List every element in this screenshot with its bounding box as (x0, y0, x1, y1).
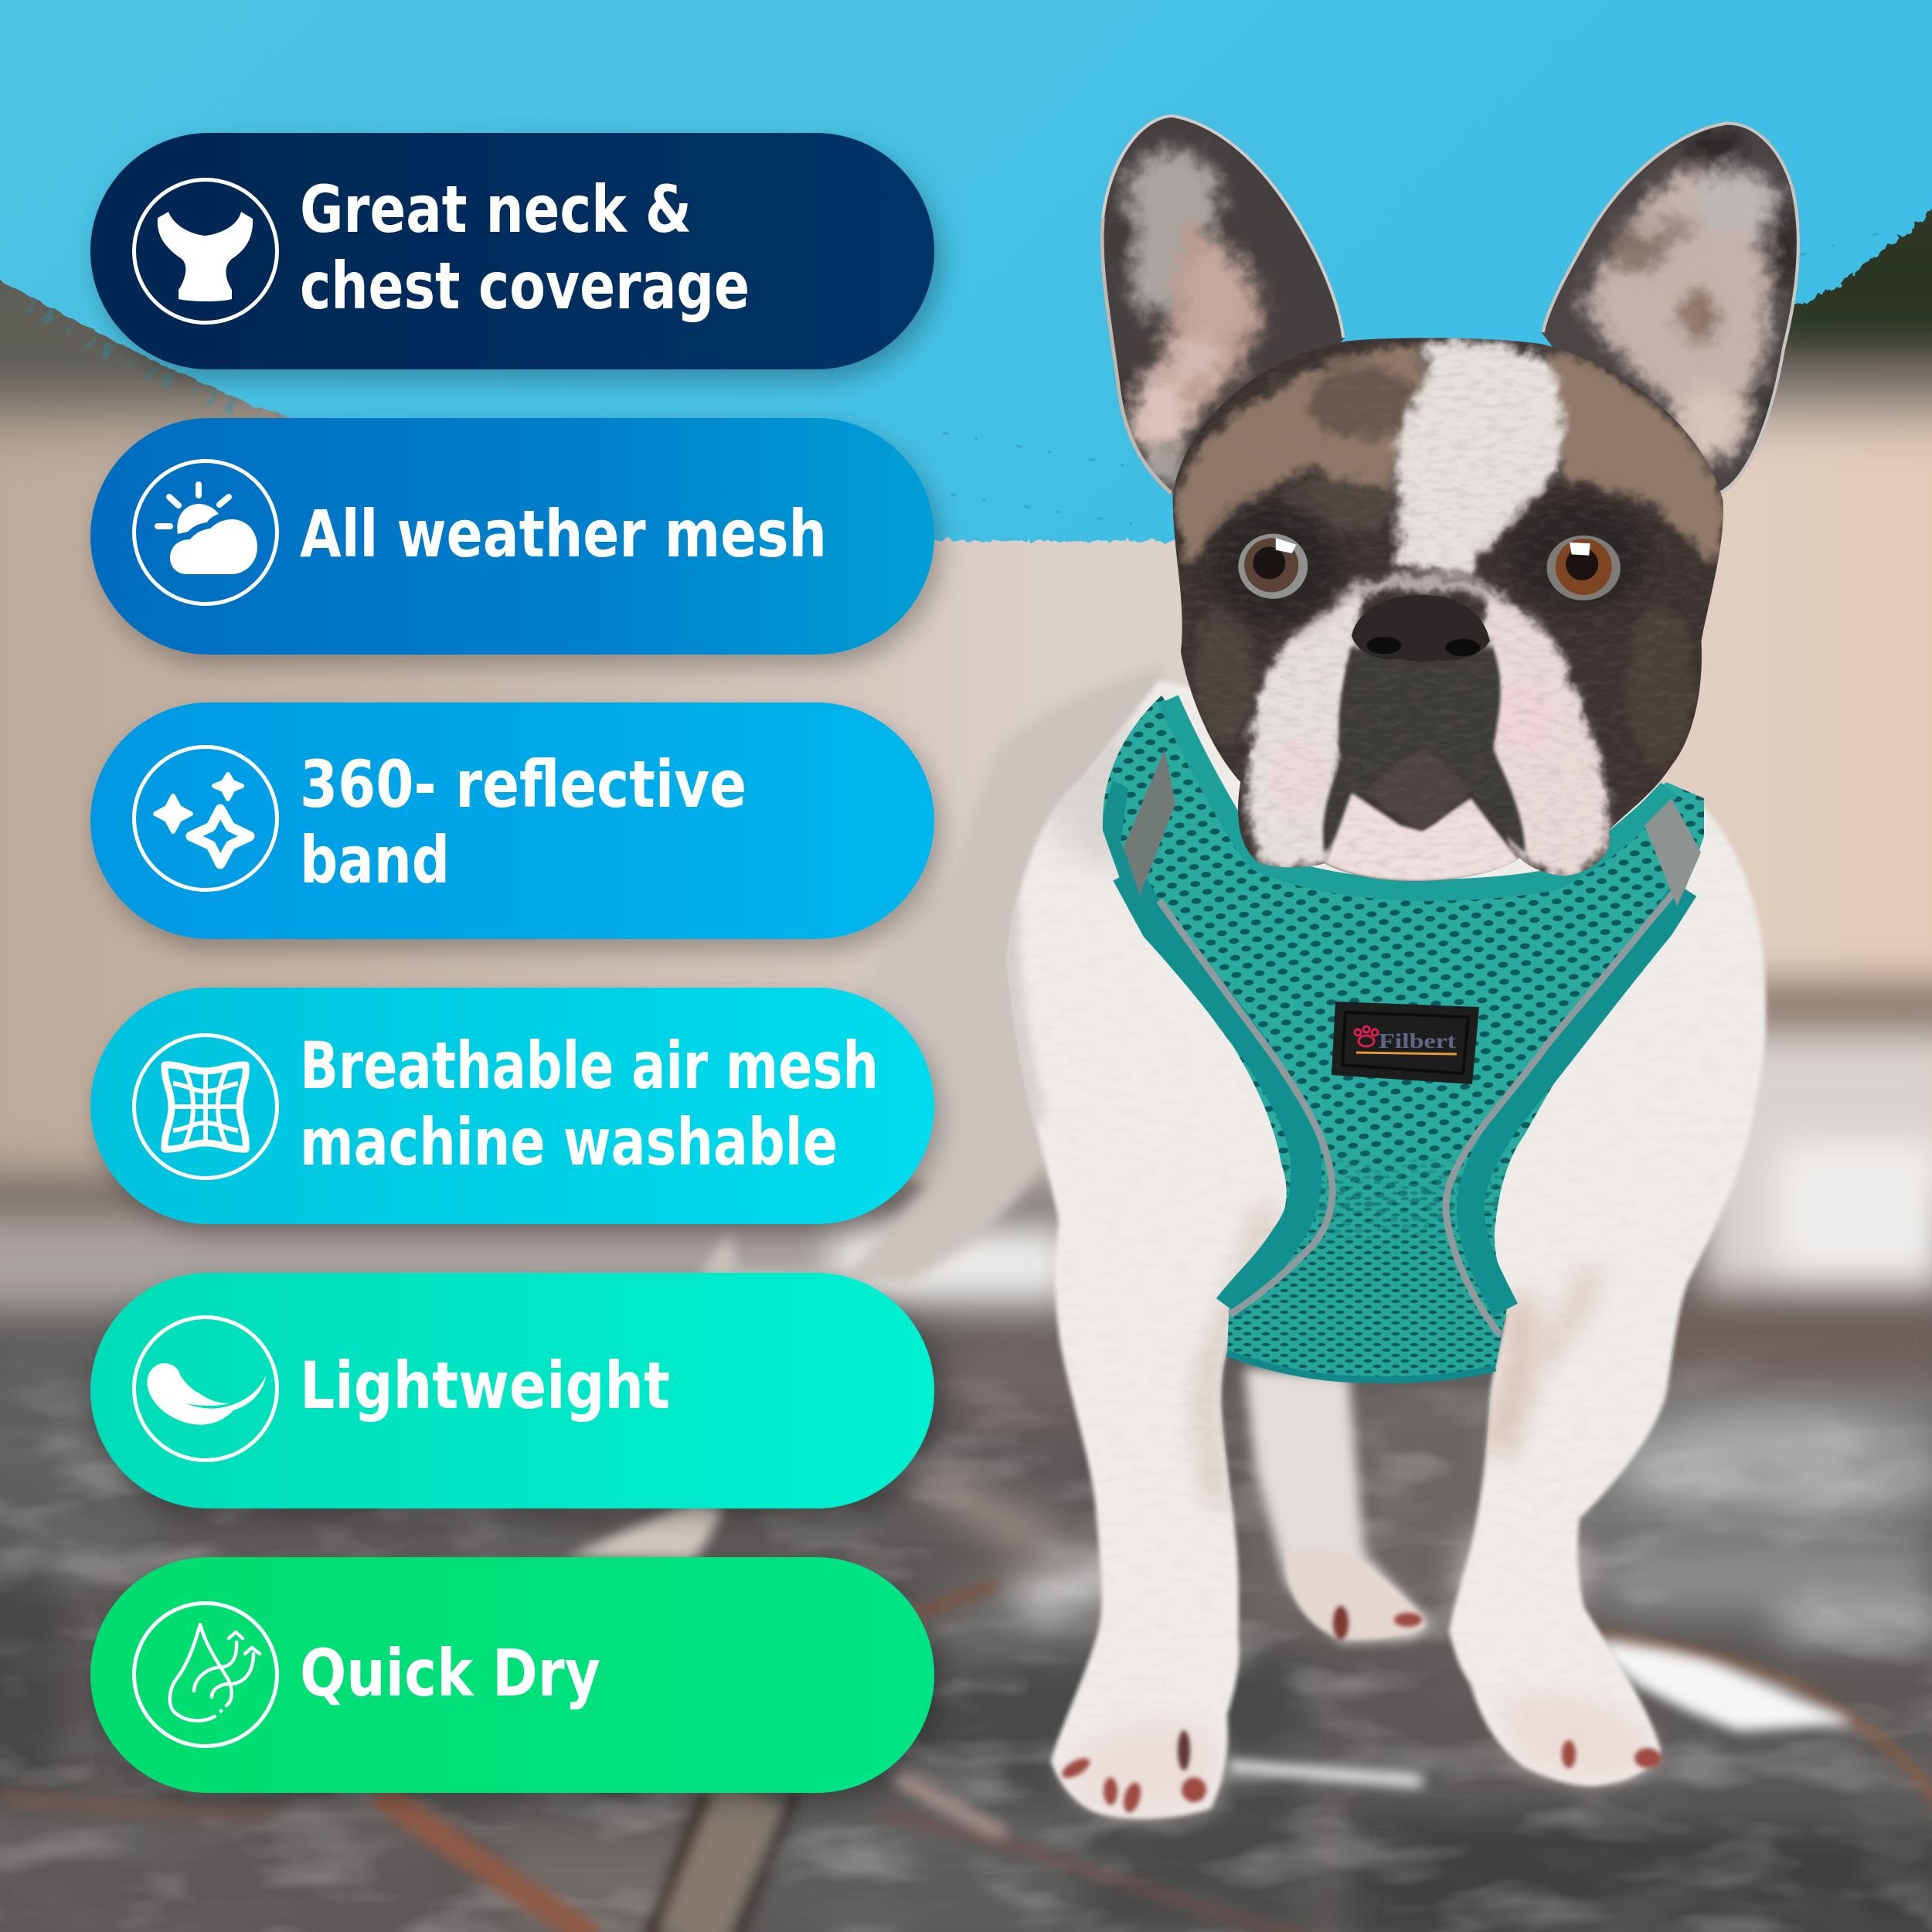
pill 6: quick dry (90, 1557, 934, 1793)
dark centre muzzle (1323, 647, 1525, 852)
left ear (1100, 114, 1345, 495)
label: band (300, 822, 450, 898)
icon: vest (134, 179, 277, 323)
dog front body and legs (1005, 680, 1777, 1824)
icon: feather (134, 1317, 277, 1461)
label: 360- reflective (300, 747, 747, 822)
harness (1103, 696, 1704, 1430)
brand tag (1332, 1002, 1479, 1084)
right ear (1541, 121, 1800, 495)
nose bridge (1341, 583, 1503, 600)
sky-blue painted shape (0, 0, 1932, 541)
icon: water drop with arrows (134, 1603, 277, 1747)
pill 5: lightweight (90, 1273, 934, 1509)
label: Breathable air mesh (300, 1028, 879, 1104)
dog head (1100, 114, 1800, 890)
right eye (1547, 536, 1621, 600)
icon: sun and cloud (134, 461, 277, 604)
mouth (1362, 750, 1471, 830)
harness bottom hem (1227, 1353, 1495, 1379)
eye patch (1211, 503, 1341, 628)
label: All weather mesh (300, 496, 827, 572)
label (300, 747, 747, 898)
nose (1352, 595, 1490, 662)
left reflective strip (1124, 750, 1175, 896)
muzzle right (1481, 590, 1609, 876)
muzzle left (1247, 590, 1362, 869)
front paws (1059, 1696, 1661, 1815)
fur texture (1167, 332, 1731, 890)
label: Quick Dry (300, 1635, 600, 1711)
right reflective strip (1645, 798, 1701, 906)
forehead (1172, 341, 1726, 876)
label: chest coverage (300, 248, 750, 324)
pill 1: neck and chest coverage (90, 133, 934, 369)
white blaze (1395, 341, 1562, 576)
pill 4: breathable air mesh (90, 988, 934, 1224)
label: machine washable (300, 1104, 838, 1180)
icon: mesh fabric (134, 1036, 277, 1178)
left strap (1103, 781, 1151, 923)
chin (1325, 793, 1519, 882)
label: Great neck & (300, 172, 692, 247)
harness neck binding (1168, 699, 1669, 890)
label (300, 172, 750, 324)
label (300, 1028, 879, 1180)
harness side bindings (1127, 873, 1685, 1335)
head base (1172, 338, 1723, 881)
dog rear paw (1286, 1549, 1426, 1640)
pill 2: all weather mesh (90, 418, 934, 655)
icon: sparkles (134, 747, 277, 890)
left eye (1238, 534, 1308, 599)
pill 3: reflective band (90, 702, 934, 939)
dog rear body blurred (568, 665, 1430, 1642)
label: Lightweight (300, 1348, 670, 1423)
brand tag: Filbert (1379, 1029, 1456, 1053)
paw mark (1355, 1026, 1378, 1046)
